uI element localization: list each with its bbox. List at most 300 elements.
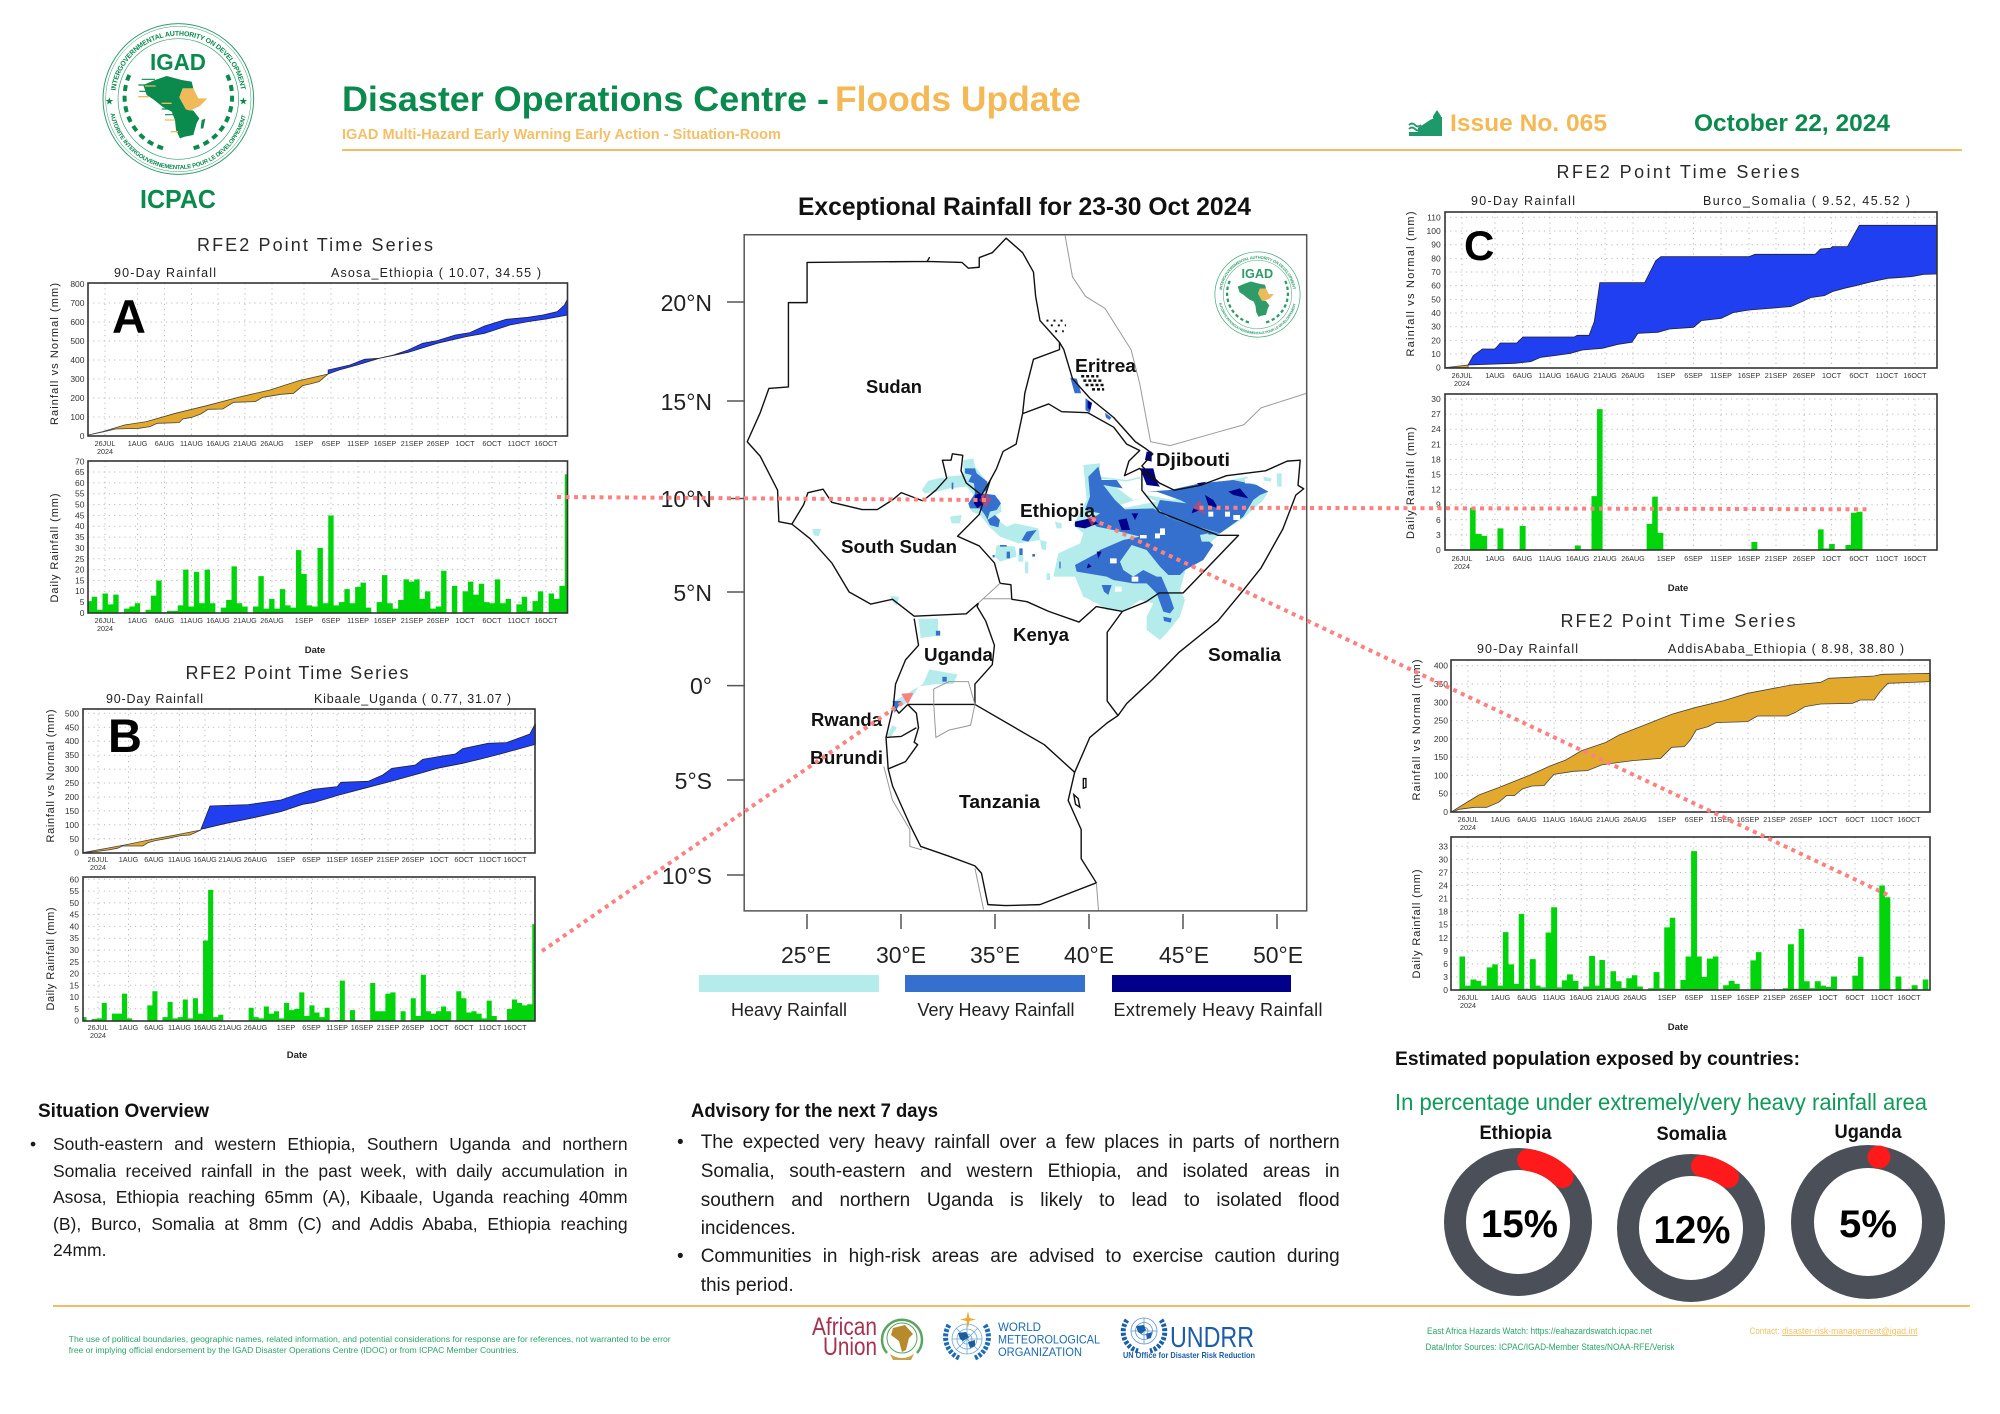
- logo: African Union: Union: [823, 1333, 877, 1361]
- chart D: Addis Ababa: Rainfall vs Normal (mm): [1411, 660, 1423, 800]
- chart D: Addis Ababa: 0: [1443, 985, 1448, 995]
- chart A: Asosa: 6OCT: [482, 616, 502, 625]
- chart B: Kibaale: 50: [70, 898, 79, 908]
- chart C: Burco: 9: [1436, 500, 1441, 510]
- map legend: Extremely Heavy Rainfall: [1114, 1000, 1322, 1020]
- latitude labels: 10°S: [662, 863, 712, 889]
- text block: advisory: southern and northern Uganda is likely to lead to isolated flood: [701, 1190, 1340, 1211]
- chart D: Addis Ababa: 24: [1439, 880, 1448, 890]
- chart D: Addis Ababa: 2024: [1460, 1001, 1476, 1010]
- chart D: Addis Ababa: 30: [1439, 854, 1448, 864]
- chart C: Burco: RFE2 Point Time Series: [1556, 162, 1800, 182]
- heading: situation overview: Situation Overview: [38, 1101, 209, 1122]
- chart D: Addis Ababa: 16AUG: [1569, 815, 1593, 824]
- chart A: Asosa: 16AUG: [206, 616, 230, 625]
- chart D: Addis Ababa: 15: [1439, 920, 1448, 930]
- chart B: Kibaale: 11OCT: [479, 1023, 502, 1032]
- chart C: Burco: 26JUL: [1452, 554, 1472, 563]
- chart C: Burco: 18: [1431, 454, 1441, 464]
- disclaimer: free or implying official endorsement by the IGAD Disaster Operations Centre (IDOC) or from ICPAC Member Countries.: [69, 1345, 519, 1355]
- chart D: Addis Ababa: 400: [1434, 661, 1448, 671]
- chart C: Burco: 1AUG: [1485, 554, 1505, 563]
- chart C: Burco: 21AUG: [1593, 371, 1617, 380]
- chart D: Addis Ababa: 26AUG: [1623, 815, 1647, 824]
- latitude labels: 20°N: [661, 290, 712, 316]
- chart B: Kibaale: 1AUG: [119, 1023, 139, 1032]
- chart D: Addis Ababa: 26SEP: [1790, 993, 1812, 1002]
- chart C: Burco: 6OCT: [1849, 554, 1869, 563]
- donut: Ethiopia 15%: 15%: [1481, 1203, 1558, 1246]
- chart D: Addis Ababa: Daily Rainfall (mm): [1411, 870, 1423, 978]
- chart B: Kibaale: 30: [70, 945, 79, 955]
- chart C: Burco: 16SEP: [1738, 554, 1760, 563]
- logo: WMO: [946, 1311, 1101, 1359]
- chart D: Addis Ababa: 6AUG: [1517, 993, 1537, 1002]
- icon: IGAD logo: AUTORITE INTERGOUVERNEMENTALE POUR LE DEVELOPPEMENT: [110, 114, 246, 170]
- chart D: Addis Ababa: 33: [1439, 841, 1448, 851]
- chart C: Burco: 1AUG: [1485, 371, 1505, 380]
- footer sources: [1426, 1326, 1675, 1353]
- chart B: Kibaale: Rainfall vs Normal (mm): [45, 710, 57, 842]
- longitude labels: [781, 942, 1303, 968]
- chart B: Kibaale: 45: [70, 910, 79, 920]
- chart B: Kibaale: 0: [74, 1016, 79, 1026]
- chart C: Burco: 6AUG: [1513, 371, 1533, 380]
- chart A: Asosa: Date: [305, 645, 325, 656]
- chart D: Addis Ababa: 21SEP: [1763, 815, 1786, 824]
- chart C: Burco: 16OCT: [1903, 371, 1927, 380]
- chart D: Addis Ababa: 6SEP: [1685, 815, 1703, 824]
- donut: Uganda 5%: 5%: [1839, 1203, 1897, 1246]
- chart D: Addis Ababa: 11AUG: [1542, 993, 1566, 1002]
- chart B: Kibaale: 250: [65, 778, 79, 788]
- chart B: Kibaale: 16OCT: [503, 855, 527, 864]
- chart D: Addis Ababa: 26JUL: [1458, 993, 1478, 1002]
- icon: IGAD logo: [102, 23, 254, 175]
- disclaimer: The use of political boundaries, geographic names, related information, and potential considerations for response are for references, not warranted to be error: [69, 1334, 671, 1344]
- chart B: Kibaale: 16SEP: [351, 855, 373, 864]
- chart D: Addis Ababa: 16SEP: [1737, 993, 1759, 1002]
- country labels: [810, 355, 1282, 812]
- chart D: Addis Ababa: 300: [1434, 697, 1448, 707]
- icon: IGAD logo: INTERGOVERNMENTAL AUTHORITY ON DEVELOPMENT: [110, 30, 246, 90]
- text block: situation overview: [30, 1134, 628, 1260]
- chart A: Asosa: 25: [75, 554, 85, 564]
- chart C: Burco: 11AUG: [1538, 554, 1562, 563]
- icon: flood house: [1409, 110, 1442, 136]
- chart A: Asosa: 0: [80, 431, 85, 441]
- chart D: Addis Ababa: 21: [1439, 894, 1448, 904]
- dotted connector: A to Asosa: [557, 497, 986, 500]
- chart C: Burco: 1SEP: [1657, 371, 1675, 380]
- chart B: Kibaale: 200: [65, 792, 79, 802]
- chart A: Asosa: 1AUG: [128, 616, 148, 625]
- chart A: Asosa: 16AUG: [206, 439, 230, 448]
- logo: WMO: METEOROLOGICAL: [998, 1334, 1101, 1346]
- chart D: Addis Ababa: 21AUG: [1596, 815, 1620, 824]
- longitude labels: 40°E: [1064, 942, 1114, 968]
- text block: situation overview: Somalia received rainfall in the past week, with daily accumulation in: [53, 1161, 628, 1181]
- country labels: Rwanda: [811, 709, 883, 730]
- chart B: Kibaale: 21SEP: [377, 855, 399, 864]
- chart C: Burco: 1OCT: [1822, 371, 1842, 380]
- chart B: Kibaale: 16AUG: [193, 1023, 217, 1032]
- chart D: Addis Ababa: 9: [1443, 946, 1448, 956]
- latitude labels: 5°N: [673, 580, 712, 606]
- chart C: Burco: 6AUG: [1513, 554, 1533, 563]
- chart C: Burco: Rainfall vs Normal (mm): [1405, 212, 1417, 356]
- markers: [901, 493, 1206, 704]
- chart A: Asosa: 1OCT: [455, 439, 475, 448]
- text block: advisory: Communities in high-risk areas are advised to exercise caution during: [701, 1246, 1340, 1267]
- chart C: Burco: 12: [1431, 485, 1441, 495]
- chart D: Addis Ababa: 100: [1434, 770, 1448, 780]
- chart D: Addis Ababa: 0: [1443, 807, 1448, 817]
- chart D: Addis Ababa: 3: [1443, 972, 1448, 982]
- chart B: Kibaale: 6SEP: [302, 855, 321, 864]
- chart B: Kibaale: 90-Day Rainfall: [106, 692, 203, 706]
- chart B: Kibaale: B: [108, 709, 142, 762]
- chart B: Kibaale: 11AUG: [168, 1023, 191, 1032]
- chart D: Addis Ababa: 21AUG: [1596, 993, 1620, 1002]
- chart A: Asosa: 300: [70, 374, 85, 384]
- chart C: Burco: 6: [1436, 515, 1441, 525]
- chart C: Burco: 11OCT: [1876, 371, 1899, 380]
- chart A: Asosa: 1OCT: [455, 616, 475, 625]
- chart C: Burco: 16OCT: [1903, 554, 1927, 563]
- donut: Somalia 12%: 12%: [1654, 1209, 1730, 1252]
- chart D: Addis Ababa: 26SEP: [1790, 815, 1812, 824]
- chart A: Asosa: 45: [75, 510, 85, 520]
- latitude labels: 5°S: [675, 768, 712, 794]
- country labels: Tanzania: [959, 791, 1041, 812]
- chart A: Asosa: Asosa_Ethiopia ( 10.07, 34.55 ): [331, 266, 541, 280]
- chart A: Asosa: 6AUG: [155, 439, 175, 448]
- chart B: Kibaale: 11SEP: [326, 855, 348, 864]
- chart D: Addis Ababa: 250: [1434, 716, 1448, 726]
- country labels: Djibouti: [1156, 449, 1230, 470]
- chart A: Asosa: 2024: [97, 447, 113, 456]
- chart A: Asosa: 26JUL: [95, 616, 115, 625]
- chart D: Addis Ababa: 11AUG: [1542, 815, 1566, 824]
- dotted connector: D to Addis Ababa: [1092, 519, 1888, 895]
- chart A: Asosa: 16SEP: [374, 439, 396, 448]
- chart D: Addis Ababa: 1SEP: [1658, 993, 1676, 1002]
- chart C: Burco: 70: [1431, 267, 1441, 277]
- chart C: Burco: 2024: [1454, 562, 1470, 571]
- donut: Ethiopia 15%: [1455, 1123, 1581, 1285]
- chart B: Kibaale: 40: [70, 921, 79, 931]
- chart C: Burco: 16SEP: [1738, 371, 1760, 380]
- chart C: Burco: 6SEP: [1684, 371, 1703, 380]
- chart B: Kibaale: Daily Rainfall (mm): [45, 908, 57, 1010]
- chart C: Burco: 21SEP: [1765, 554, 1787, 563]
- chart D: Addis Ababa: 6AUG: [1517, 815, 1537, 824]
- chart A: Asosa: 26AUG: [260, 616, 284, 625]
- chart A: Asosa: 400: [70, 355, 85, 365]
- chart B: Kibaale: 26AUG: [244, 1023, 268, 1032]
- chart C: Burco: Date: [1668, 583, 1688, 594]
- chart C: Burco: Daily Rainfall (mm): [1405, 427, 1417, 539]
- chart A: Asosa: 11OCT: [508, 439, 531, 448]
- chart D: Addis Ababa: 16AUG: [1569, 993, 1593, 1002]
- logo: African Union: [812, 1313, 922, 1361]
- chart D: Addis Ababa: 21SEP: [1763, 993, 1786, 1002]
- date: October 22, 2024: [1694, 110, 1891, 137]
- chart A: Asosa: 11OCT: [508, 616, 531, 625]
- latitude labels: 0°: [690, 673, 712, 699]
- chart D: Addis Ababa: 1OCT: [1818, 815, 1838, 824]
- chart C: Burco: 15: [1431, 470, 1441, 480]
- chart D: Addis Ababa: 26AUG: [1623, 993, 1647, 1002]
- chart A: Asosa: 200: [70, 393, 85, 403]
- chart A: Asosa: 20: [75, 565, 85, 575]
- chart A: Asosa: RFE2 Point Time Series: [197, 235, 433, 255]
- rainfall: Eritrea, Uganda and Rwanda: [812, 378, 1112, 737]
- chart D: Addis Ababa: 18: [1439, 907, 1448, 917]
- chart B: Kibaale: 11OCT: [479, 855, 502, 864]
- chart D: Addis Ababa: 16OCT: [1897, 815, 1921, 824]
- chart D: Addis Ababa: 16SEP: [1737, 815, 1759, 824]
- chart C: Burco: 27: [1431, 409, 1441, 419]
- text block: situation overview: (B), Burco, Somalia at 8mm (C) and Addis Ababa, Ethiopia reaching: [53, 1214, 628, 1234]
- chart D: Addis Ababa: 6OCT: [1845, 993, 1865, 1002]
- icon: small IGAD logo: AUTORITE INTERGOUVERNEMENTALE POUR LE DEVELOPPEMENT: [1219, 302, 1296, 334]
- chart D: Addis Ababa: 200: [1434, 734, 1448, 744]
- chart A: Asosa: [49, 235, 568, 656]
- dotted connector: B to Kibaale: [542, 699, 908, 951]
- chart C: Burco: 110: [1427, 212, 1441, 222]
- chart A: Asosa: 11SEP: [347, 616, 369, 625]
- country labels: Uganda: [924, 644, 994, 665]
- chart A: Asosa: A: [112, 290, 146, 343]
- country labels: South Sudan: [841, 536, 957, 557]
- chart B: Kibaale: 16SEP: [351, 1023, 373, 1032]
- chart A: Asosa: 10: [75, 586, 85, 596]
- chart A: Asosa: 100: [70, 412, 85, 422]
- chart C: Burco: 26SEP: [1793, 554, 1815, 563]
- chart A: Asosa: 16SEP: [374, 616, 396, 625]
- chart B: Kibaale: 450: [65, 722, 79, 732]
- latitude labels: 10°N: [661, 486, 712, 512]
- chart B: Kibaale: 6AUG: [144, 855, 164, 864]
- chart D: Addis Ababa: 11OCT: [1871, 815, 1894, 824]
- chart A: Asosa: 21AUG: [233, 439, 257, 448]
- country labels: Sudan: [866, 376, 922, 397]
- chart C: Burco: 80: [1431, 253, 1441, 263]
- chart D: Addis Ababa: 11OCT: [1871, 993, 1894, 1002]
- chart D: Addis Ababa: 12: [1439, 933, 1448, 943]
- logo: UNDRR: [1123, 1318, 1255, 1360]
- map axis ticks: [727, 302, 1277, 929]
- text block: advisory: this period.: [701, 1275, 794, 1296]
- chart D: Addis Ababa: 1SEP: [1658, 815, 1676, 824]
- chart A: Asosa: 70: [75, 456, 85, 466]
- text block: situation overview: •: [30, 1134, 36, 1154]
- chart A: Asosa: 0: [80, 608, 85, 618]
- chart B: Kibaale: 1SEP: [277, 1023, 295, 1032]
- logo: African Union: African: [812, 1313, 877, 1341]
- chart B: Kibaale: 26SEP: [402, 855, 424, 864]
- chart C: Burco: C: [1464, 222, 1494, 269]
- text block: situation overview: Asosa, Ethiopia reaching 65mm (A), Kibaale, Uganda reaching 40mm: [53, 1187, 628, 1207]
- chart C: Burco: 50: [1431, 294, 1441, 304]
- chart A: Asosa: 55: [75, 489, 85, 499]
- chart D: Addis Ababa: 1AUG: [1491, 815, 1511, 824]
- chart A: Asosa: 500: [70, 336, 85, 346]
- chart B: Kibaale: 400: [65, 736, 79, 746]
- footer contact: Contact:: [1750, 1326, 1780, 1337]
- chart D: Addis Ababa: 11SEP: [1710, 993, 1732, 1002]
- chart B: Kibaale: 21AUG: [218, 1023, 242, 1032]
- text block: situation overview: South-eastern and western Ethiopia, Southern Uganda and northern: [53, 1134, 628, 1154]
- chart B: Kibaale: 25: [70, 957, 79, 967]
- chart C: Burco: 30: [1431, 394, 1441, 404]
- chart C: Burco: 26AUG: [1621, 371, 1645, 380]
- chart A: Asosa: 26SEP: [427, 616, 449, 625]
- heading: population exposed: Estimated population exposed by countries:: [1395, 1049, 1800, 1070]
- longitude labels: 30°E: [876, 942, 926, 968]
- chart B: Kibaale: Kibaale_Uganda ( 0.77, 31.07 ): [314, 692, 511, 706]
- donut: Uganda 5%: Uganda: [1834, 1122, 1902, 1143]
- chart B: Kibaale: 21AUG: [218, 855, 242, 864]
- chart C: Burco: [1405, 162, 1937, 594]
- disclaimer: [69, 1334, 671, 1355]
- chart B: Kibaale: 11SEP: [326, 1023, 348, 1032]
- chart B: Kibaale: 26SEP: [402, 1023, 424, 1032]
- chart A: Asosa: 1SEP: [295, 616, 313, 625]
- chart D: Addis Ababa: 50: [1439, 789, 1448, 799]
- chart B: Kibaale: 16OCT: [503, 1023, 527, 1032]
- subheading: percentage: In percentage under extremely/very heavy rainfall area: [1395, 1089, 1927, 1115]
- chart B: Kibaale: 35: [70, 933, 79, 943]
- chart B: Kibaale: 6OCT: [454, 1023, 474, 1032]
- chart D: Addis Ababa: [1411, 611, 1930, 1033]
- logo: UNDRR: UNDRR: [1170, 1322, 1254, 1354]
- footer sources: Data/Infor Sources: ICPAC/IGAD-Member States/NOAA-RFE/Verisk: [1426, 1342, 1675, 1353]
- icon: small IGAD logo: [1214, 252, 1300, 338]
- chart C: Burco: 26AUG: [1621, 554, 1645, 563]
- map: exceptional rainfall: [661, 234, 1308, 968]
- map legend: [699, 975, 1322, 1020]
- chart A: Asosa: 1SEP: [295, 439, 313, 448]
- icon: IGAD logo: ★: [239, 96, 248, 107]
- chart A: Asosa: 26JUL: [95, 439, 115, 448]
- longitude labels: 45°E: [1159, 942, 1209, 968]
- text block: situation overview: 24mm.: [53, 1240, 106, 1260]
- latitude labels: 15°N: [661, 389, 712, 415]
- chart B: Kibaale: 11AUG: [168, 855, 191, 864]
- chart C: Burco: 30: [1431, 322, 1441, 332]
- chart A: Asosa: 40: [75, 521, 85, 531]
- chart D: Addis Ababa: 16OCT: [1897, 993, 1921, 1002]
- chart A: Asosa: 21SEP: [401, 616, 423, 625]
- chart A: Asosa: 30: [75, 543, 85, 553]
- donut: Somalia 12%: Somalia: [1656, 1124, 1727, 1145]
- chart B: Kibaale: 100: [65, 820, 79, 830]
- text block: advisory: Somalia, south-eastern and western Ethiopia, and isolated areas in: [701, 1161, 1340, 1182]
- chart A: Asosa: 21AUG: [233, 616, 257, 625]
- logo: WMO: ORGANIZATION: [998, 1347, 1082, 1359]
- chart C: Burco: 1SEP: [1657, 554, 1675, 563]
- chart B: Kibaale: 21SEP: [377, 1023, 399, 1032]
- map legend: Heavy Rainfall: [731, 1000, 847, 1020]
- chart B: Kibaale: 26JUL: [88, 1023, 108, 1032]
- chart C: Burco: 11OCT: [1876, 554, 1899, 563]
- chart B: Kibaale: RFE2 Point Time Series: [186, 663, 408, 683]
- heading: advisory: Advisory for the next 7 days: [691, 1101, 938, 1122]
- chart D: Addis Ababa: 27: [1439, 868, 1448, 878]
- chart B: Kibaale: 1OCT: [429, 855, 449, 864]
- country labels: Eritrea: [1075, 355, 1137, 376]
- map frame: [744, 235, 1307, 911]
- chart A: Asosa: 65: [75, 467, 85, 477]
- chart C: Burco: 11SEP: [1710, 554, 1732, 563]
- issue number: Issue No. 065: [1450, 110, 1607, 137]
- chart B: Kibaale: 0: [74, 848, 79, 858]
- dotted connector: C to Burco: [1200, 508, 1870, 509]
- chart C: Burco: 11AUG: [1538, 371, 1562, 380]
- longitude labels: 50°E: [1253, 942, 1303, 968]
- chart B: Kibaale: 6SEP: [302, 1023, 321, 1032]
- chart B: Kibaale: [45, 663, 535, 1061]
- chart A: Asosa: 5: [80, 597, 85, 607]
- chart A: Asosa: 50: [75, 500, 85, 510]
- chart B: Kibaale: 1AUG: [119, 855, 139, 864]
- chart B: Kibaale: 300: [65, 764, 79, 774]
- chart B: Kibaale: 50: [70, 834, 79, 844]
- chart B: Kibaale: 60: [70, 874, 79, 884]
- chart A: Asosa: 35: [75, 532, 85, 542]
- chart B: Kibaale: Date: [287, 1050, 307, 1061]
- donut: Ethiopia 15%: Ethiopia: [1480, 1123, 1552, 1144]
- chart B: Kibaale: 6OCT: [454, 855, 474, 864]
- chart D: Addis Ababa: 150: [1434, 752, 1448, 762]
- chart C: Burco: 90: [1431, 240, 1441, 250]
- chart B: Kibaale: 55: [70, 886, 79, 896]
- chart C: Burco: 60: [1431, 281, 1441, 291]
- chart C: Burco: 21SEP: [1765, 371, 1787, 380]
- latitude labels: [661, 290, 712, 889]
- chart A: Asosa: 11SEP: [347, 439, 369, 448]
- chart A: Asosa: 1AUG: [128, 439, 148, 448]
- chart A: Asosa: 16OCT: [534, 439, 558, 448]
- chart C: Burco: 10: [1431, 349, 1441, 359]
- chart C: Burco: 26JUL: [1452, 371, 1472, 380]
- chart D: Addis Ababa: 2024: [1460, 823, 1476, 832]
- chart A: Asosa: 6AUG: [155, 616, 175, 625]
- chart A: Asosa: 11AUG: [180, 616, 203, 625]
- rainfall: eastern Ethiopia and northern Somalia: [1053, 452, 1282, 640]
- chart B: Kibaale: 10: [70, 992, 79, 1002]
- country labels: Ethiopia: [1020, 500, 1096, 521]
- chart C: Burco: 0: [1436, 545, 1441, 555]
- map legend: Very Heavy Rainfall: [917, 1000, 1075, 1020]
- chart A: Asosa: 6SEP: [322, 439, 340, 448]
- chart C: Burco: 40: [1431, 308, 1441, 318]
- chart C: Burco: Burco_Somalia ( 9.52, 45.52 ): [1703, 194, 1910, 208]
- chart B: Kibaale: 26JUL: [88, 855, 108, 864]
- chart D: Addis Ababa: RFE2 Point Time Series: [1560, 611, 1796, 631]
- chart C: Burco: 1OCT: [1822, 554, 1842, 563]
- donut: Somalia 12%: [1628, 1124, 1754, 1291]
- chart A: Asosa: 26SEP: [427, 439, 449, 448]
- chart A: Asosa: 60: [75, 478, 85, 488]
- longitude labels: 35°E: [970, 942, 1020, 968]
- subtitle: IGAD Multi-Hazard Early Warning Early Action - Situation-Room: [342, 127, 781, 143]
- chart C: Burco: 6SEP: [1684, 554, 1703, 563]
- chart D: Addis Ababa: 1AUG: [1491, 993, 1511, 1002]
